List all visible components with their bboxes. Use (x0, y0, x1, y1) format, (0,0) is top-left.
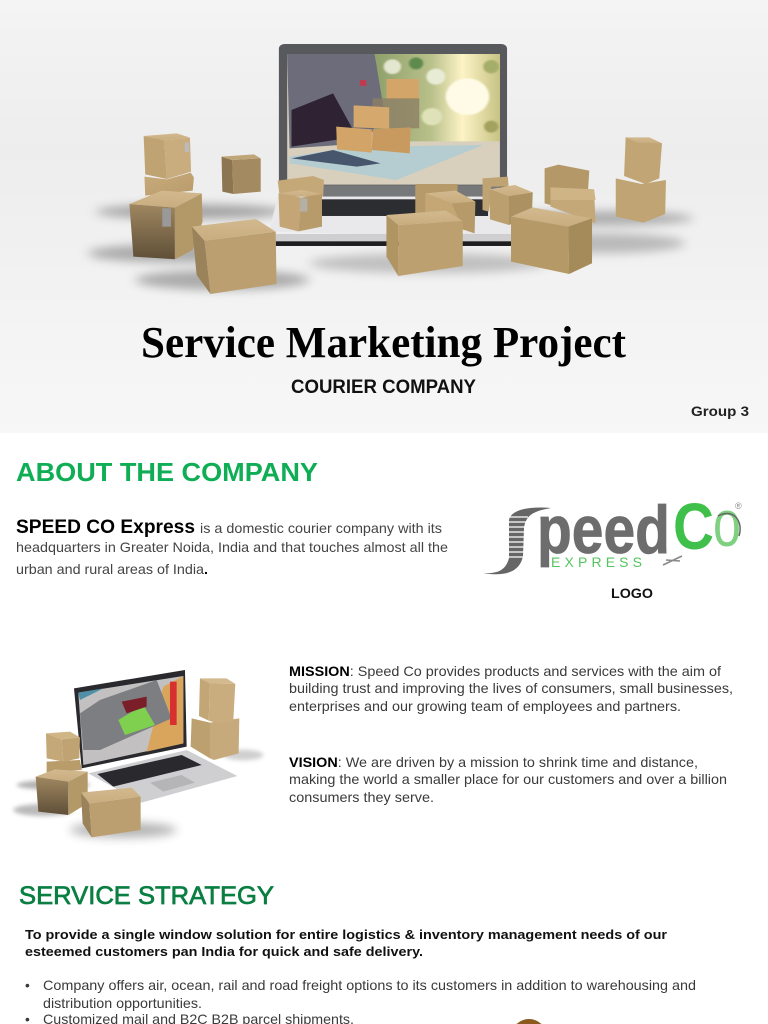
vision text: VISION: We are driven by a mission to shrink time and distance, (289, 755, 698, 770)
strategy bullet list: Company offers air, ocean, rail and road freight options to its customers in addition to warehousing and (43, 978, 696, 993)
strategy bullet list: • (25, 978, 30, 993)
cart and boxes on screen (386, 79, 419, 99)
about text block (16, 517, 448, 577)
group label: Group 3 (691, 403, 749, 419)
laptop (74, 670, 237, 803)
logo: SpeedCo Express (483, 486, 742, 574)
logo: SpeedCo Express: peed (537, 492, 670, 568)
hero illustration: laptop with parcels (88, 44, 693, 294)
about text block: is a domestic courier company with its (200, 520, 442, 536)
parcel: small left (222, 154, 261, 194)
heading: service strategy: SERVICE STRATEGY (19, 882, 274, 910)
parcels: stacked far right (616, 137, 666, 223)
vision text (289, 755, 727, 805)
icon: cropped brown circle (512, 1019, 546, 1024)
strategy bullet list (25, 978, 696, 1024)
hero background (0, 0, 768, 433)
vision text: making the world a smaller place for our customers and over a billion (289, 772, 727, 787)
laptop illustration with parcels (13, 670, 263, 837)
about text block: SPEED CO Express (16, 517, 195, 538)
logo: SpeedCo Express: o (713, 486, 741, 560)
about text block: headquarters in Greater Noida, India and that touches almost all the (16, 539, 448, 555)
laptop base and keyboard (269, 185, 515, 246)
parcel: right front (511, 207, 592, 274)
mission text: building trust and improving the lives of consumers, small businesses, (289, 681, 733, 696)
parcel: right of centre (483, 177, 533, 225)
strategy statement (25, 927, 667, 959)
parcels left stack (46, 732, 82, 773)
parcel: large left (129, 191, 203, 259)
laptop screen (279, 44, 507, 191)
mission text: enterprises and our growing team of employees and partners. (289, 699, 681, 714)
mission text: MISSION: Speed Co provides products and services with the aim of (289, 664, 721, 679)
parcel: centre front (386, 211, 463, 276)
strategy statement: esteemed customers pan India for quick and safe delivery. (25, 944, 423, 959)
subtitle: COURIER COMPANY (291, 377, 476, 398)
parcel front (81, 788, 141, 837)
parcel: centre back (415, 184, 475, 233)
about text block: urban and rural areas of India . (16, 561, 208, 577)
strategy bullet list: distribution opportunities. (43, 996, 202, 1011)
parcel: on keyboard left (278, 176, 324, 231)
title: Service Marketing Project (141, 318, 626, 367)
parcel: stacked upper left (144, 133, 194, 196)
mission text (289, 664, 733, 714)
vision text: consumers they serve. (289, 790, 434, 805)
logo: SpeedCo Express: ® (735, 501, 742, 511)
strategy statement: To provide a single window solution for entire logistics & inventory management needs of our (25, 927, 667, 942)
cart on screen (118, 705, 155, 735)
heading: about the company: ABOUT THE COMPANY (16, 457, 318, 487)
logo: SpeedCo Express: EXPRESS (551, 554, 642, 570)
logo swoosh S (483, 508, 551, 574)
parcel large left (36, 769, 88, 815)
parcel: front left (192, 219, 277, 294)
parcel: back right (545, 165, 596, 223)
logo caption: LOGO (611, 585, 653, 601)
logo: SpeedCo Express: C (673, 489, 714, 563)
parcels right stack (191, 678, 239, 760)
